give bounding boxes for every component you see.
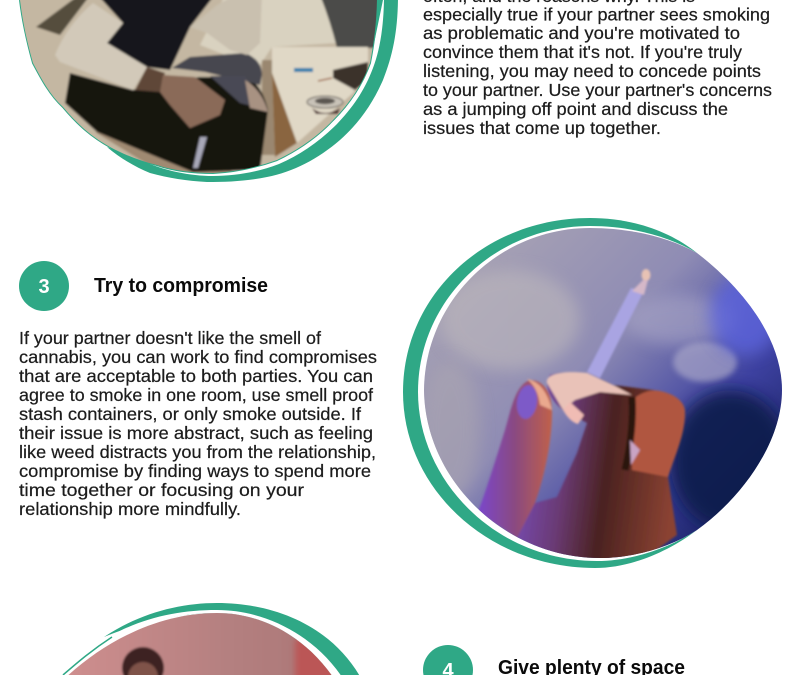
body text: step 2 continued — [423, 0, 772, 138]
pants — [65, 73, 268, 172]
sleeves — [55, 3, 147, 90]
body text: step 3: agree to smoke in one room, use smell proof — [19, 385, 373, 405]
body text: step 2 continued: as a jumping off point and discuss the — [423, 99, 728, 119]
body text: step 2 continued: to your partner. Use your partner's concerns — [423, 80, 772, 100]
table — [272, 47, 368, 157]
body text: step 3: cannabis, you can work to find compromises — [19, 347, 377, 367]
white gap — [112, 610, 344, 675]
step 3 heading: Try to compromise — [94, 275, 268, 297]
white gap — [418, 226, 697, 561]
body text: step 3: If your partner doesn't like the smell of — [19, 328, 321, 348]
step 4 number badge — [423, 645, 473, 675]
body text: step 3: like weed distracts you from the relationship, — [19, 442, 376, 462]
joint — [587, 288, 644, 378]
body text: step 2 continued: especially true if your partner sees smoking — [423, 4, 770, 24]
body text: step 2 continued: issues that come up together. — [423, 118, 661, 138]
photo content — [420, 225, 790, 562]
photo: person sitting on a sofa, circular crop with green crescent — [0, 0, 400, 187]
green crescent frame — [107, 0, 398, 182]
arm and hand — [135, 67, 165, 92]
body text: step 2 continued: as problematic and you're motivated to — [423, 23, 740, 43]
body text: step 2 continued: listening, you may need to concede points — [423, 61, 761, 81]
body text: step 3: relationship more mindfully. — [19, 499, 241, 519]
body text: step 3: compromise by finding ways to spend more — [19, 461, 371, 481]
step 3 number badge — [19, 261, 69, 311]
photo content — [20, 0, 377, 173]
green crescent frame — [104, 603, 362, 675]
body text: step 3: that are acceptable to both parties. You can — [19, 366, 373, 386]
body text: step 3 — [19, 328, 377, 519]
body text: step 3: stash containers, or only smoke outside. If — [19, 404, 361, 424]
photo outline — [63, 637, 112, 675]
photo: hand holding a joint, circular crop with green crescent — [403, 218, 790, 568]
hand — [517, 372, 685, 562]
body text: step 2 continued: convince them that it's not. If you're truly — [423, 42, 742, 62]
body text: step 3: their issue is more abstract, such as feeling — [19, 423, 373, 443]
photo outline — [20, 0, 377, 173]
body text: step 3: time together or focusing on your — [19, 480, 304, 500]
step 3 number badge: 3 — [38, 276, 50, 298]
green crescent frame — [403, 218, 697, 568]
finger — [478, 380, 552, 538]
white gap — [140, 0, 384, 176]
photo: couple against pink wall, partly cropped at the bottom — [55, 603, 362, 675]
vest — [95, 0, 217, 70]
photo content — [68, 613, 332, 675]
